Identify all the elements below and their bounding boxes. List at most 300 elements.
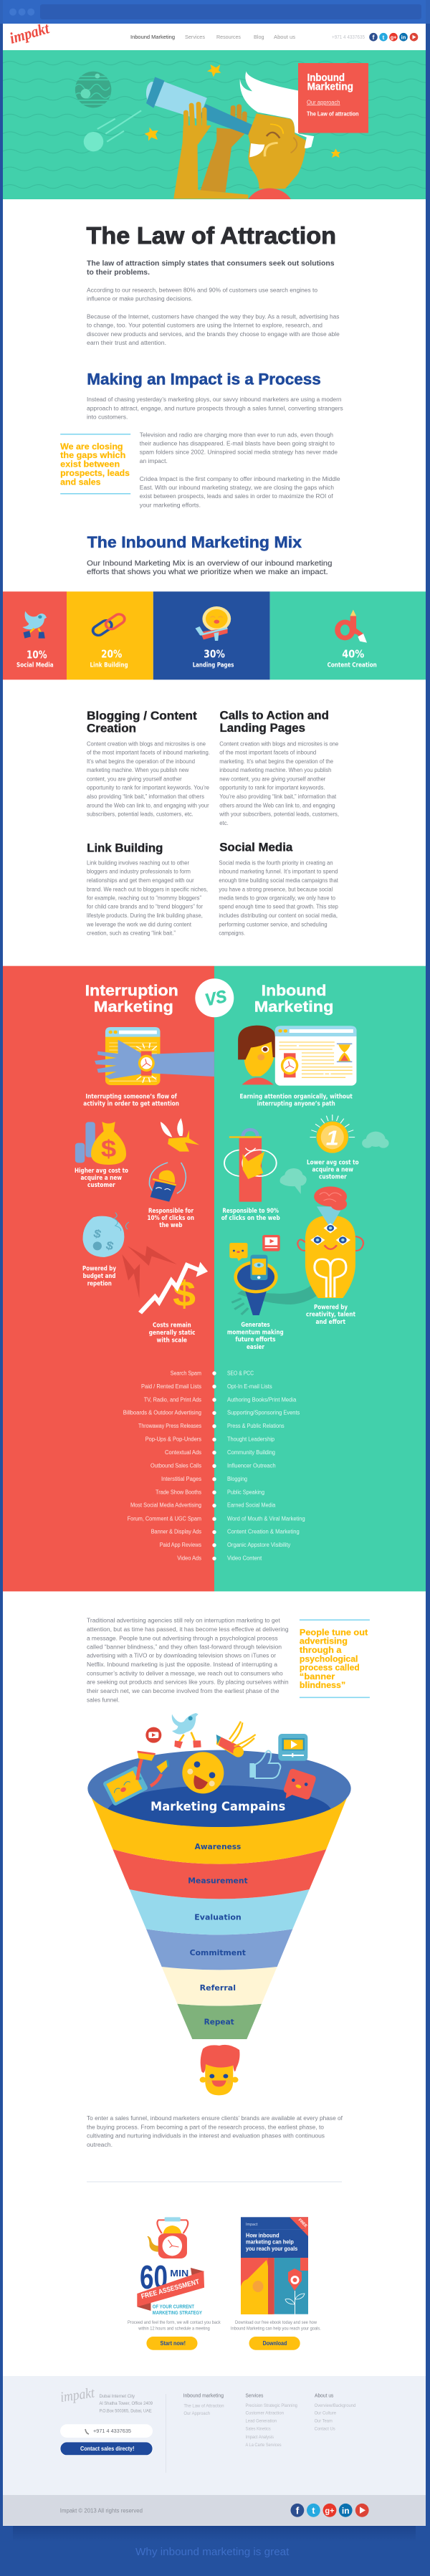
- icon: sun and plane: [195, 606, 231, 641]
- offer: free assessment: [128, 2217, 221, 2350]
- captions: interruption: Higher avg cost to: [75, 1168, 128, 1175]
- hero title card: The Law of attraction: [307, 110, 359, 117]
- article: calls to action: others around the Web can link to, and engaging: [219, 802, 335, 808]
- body text: sales funnel: outreach.: [87, 2142, 113, 2148]
- mix intro: [87, 559, 333, 576]
- list: inbound tactics: Earned Social Media: [227, 1502, 276, 1509]
- article: blogging: It’s what begins the operation of the inbound: [87, 758, 195, 765]
- body text: process intro: [87, 396, 343, 421]
- VS badge: VS: [204, 987, 229, 1010]
- body text: sales funnel: cultivating and nurturing individuals in the interest and evaluation phases with continuous: [87, 2133, 325, 2139]
- illustration: stressed head: $: [92, 1226, 103, 1241]
- lead paragraph: to their problems.: [87, 268, 150, 277]
- article: calls to action: etc.: [219, 820, 229, 826]
- illustration: chat bubble: [229, 1243, 248, 1261]
- list: inbound tactics: Organic Appstore Visibility: [227, 1542, 290, 1548]
- article: social media: performing customer service, and scheduling: [219, 921, 328, 927]
- article: blogging: also providing “link bait,” information that others: [87, 793, 204, 800]
- article: link building: for child care brands and to “trend bloggers” for: [87, 904, 203, 910]
- article: social media: campaigns.: [219, 930, 245, 937]
- article: blogging: marketing machine. When you publish new: [87, 767, 189, 773]
- nav links: Resources: [216, 34, 241, 40]
- heading: interruption marketing: [85, 982, 178, 1015]
- subtitle: of your current marketing strategy: MARKETING STRATEGY: [153, 2309, 202, 2316]
- callout: banner blindness: through a: [300, 1645, 342, 1655]
- article: social media: [219, 841, 339, 937]
- heading: inbound marketing: Inbound: [262, 982, 326, 999]
- list: interruption tactics: TV, Radio, and Print Ads: [144, 1396, 201, 1403]
- illustration: browser and wristwatch: [95, 1027, 214, 1085]
- captions: interruption: Costs remain: [153, 1322, 191, 1330]
- callout: closing the gaps: [60, 434, 130, 495]
- segment: landing pages 30%: 30%: [204, 647, 225, 660]
- button: download: [249, 2337, 300, 2350]
- offer description: Proceed and feel the form, we will contact you back: [128, 2321, 221, 2325]
- body text: research: earn their trust and attention.: [87, 340, 166, 346]
- illustration: thought cloud: [280, 1170, 307, 1194]
- captions: interruption: the web: [159, 1222, 182, 1229]
- funnel labels: Marketing Campains: [150, 1800, 285, 1814]
- offer description: Inbound Marketing can help you reach your goals.: [231, 2327, 321, 2331]
- heading: inbound marketing: Marketing: [254, 998, 333, 1015]
- list: inbound tactics: Influencer Outreach: [227, 1462, 276, 1469]
- illustration: gold coin: 1: [326, 1127, 339, 1150]
- footer links: services: Impact Analysis: [245, 2435, 274, 2440]
- captions: inbound: Lower avg cost to: [307, 1159, 359, 1166]
- illustration: video player: [262, 1235, 280, 1251]
- captions: interruption: repetion: [87, 1280, 112, 1287]
- list: interruption tactics: Paid App Reviews: [160, 1542, 201, 1548]
- article: social media: Social media is the fourth priority in creating an: [219, 859, 333, 866]
- body text: process details: Television and radio are charging more than ever to run ads, even though: [140, 431, 333, 438]
- footer links: about us: Our Culture: [315, 2411, 336, 2416]
- funnel labels: Awareness: [195, 1843, 241, 1851]
- article: blogging: Creation: [87, 722, 136, 735]
- ebook cover: you reach your goals: [246, 2245, 298, 2252]
- list: inbound tactics: Word of Mouth & Viral Marketing: [227, 1515, 305, 1522]
- article: calls to action: [219, 708, 339, 826]
- funnel band: measurement: [113, 1849, 326, 1899]
- phone pill: [60, 2424, 153, 2438]
- shirt: [248, 188, 291, 199]
- callout: banner blindness: advertising: [300, 1636, 348, 1646]
- segment: link building 20%: 20%: [101, 647, 122, 660]
- body text: research: influence or make purchasing decisions.: [87, 296, 193, 302]
- illustration: person with hat and loop: [149, 1163, 186, 1202]
- article: blogging: subscribers, potential leads, customers, etc.: [87, 811, 194, 818]
- article: link building: [86, 841, 208, 937]
- lead paragraph: [87, 259, 335, 277]
- segment: content creation 40%: 40%: [342, 648, 364, 661]
- article: blogging: Blogging / Content: [87, 709, 197, 722]
- funnel labels: Evaluation: [194, 1913, 242, 1922]
- captions: inbound: and effort: [315, 1319, 345, 1326]
- lead paragraph: The law of attraction simply states that consumers seek out solutions: [87, 259, 335, 267]
- footer links: services: Services: [245, 2393, 264, 2399]
- social icons: t: [383, 34, 385, 41]
- funnel band: repeat: [177, 2004, 262, 2039]
- hero title card: [298, 63, 368, 133]
- footer links: services: Customer Attraction: [245, 2411, 284, 2416]
- body text: process details: spam folders since 2002. Uninspired social media strategy has never made: [140, 449, 338, 456]
- captions: inbound: [221, 1093, 359, 1351]
- icon: bird: [22, 611, 47, 639]
- logo: impakt: [7, 19, 52, 47]
- illustration: money bag and coins: $: [101, 1135, 116, 1162]
- callout: banner blindness: blindness”: [300, 1680, 345, 1690]
- list: inbound tactics: Community Building: [227, 1449, 275, 1456]
- address: Dubai Internet City: [99, 2394, 135, 2399]
- comet: [84, 110, 141, 151]
- text: 60 min: 60: [140, 2258, 168, 2296]
- article: calls to action: with your subscribers, potential leads, customers,: [219, 811, 339, 818]
- subtitle: of your current marketing strategy: [153, 2304, 202, 2316]
- body text: process intro: approach to attract, engage, and nurture prospects through a sales funnel, converting strangers: [87, 406, 343, 411]
- list: interruption tactics: Forum, Comment & UGC Spam: [128, 1515, 201, 1522]
- list: interruption tactics: Paid / Rented Email Lists: [141, 1383, 201, 1390]
- article: link building: bloggers and industry professionals to form: [87, 869, 191, 875]
- panel: inbound marketing: [214, 966, 426, 1591]
- icon: smiley: [182, 1752, 224, 1793]
- captions: interruption: acquire a new: [80, 1175, 122, 1182]
- list: inbound tactics: [227, 1370, 305, 1561]
- article: blogging: around the Web can link to, and engaging with your: [87, 802, 209, 808]
- segment: social media 10%: [3, 591, 67, 679]
- article: calls to action: new content, you are giving yourself another: [219, 776, 326, 782]
- article: link building: lifestyle products. During the link building phase,: [87, 912, 203, 919]
- body text: banner blindness: Netflix. Inbound marketing is just the opposite. Instead of interrupting a: [87, 1661, 278, 1668]
- social icons: g+: [391, 36, 396, 40]
- article: link building: creation, such as creating “link bait.”: [87, 930, 176, 937]
- social icons: [291, 2504, 369, 2517]
- article: social media: Social Media: [219, 841, 293, 854]
- captions: inbound: Earning attention organically, without: [239, 1093, 353, 1100]
- ebook cover: FREE: [297, 2218, 308, 2228]
- article: link building: Link building involves reaching out to other: [87, 859, 189, 866]
- heading: interruption marketing: Marketing: [94, 998, 173, 1015]
- icon: bird: [172, 1713, 201, 1748]
- callout: banner blindness: People tune out: [300, 1628, 368, 1638]
- offer description: [231, 2321, 321, 2331]
- text: 60 min: MIN: [170, 2269, 188, 2279]
- offer description: within 12 hours and schedule a meeting: [138, 2327, 210, 2331]
- footer links: services: Precision Strategic Planning: [245, 2403, 297, 2408]
- contact button: Contact sales directy!: [80, 2446, 135, 2452]
- address: [99, 2394, 153, 2413]
- body text: research: discover new products and services, and the brands they choose to engage with are those able: [87, 331, 340, 338]
- list: inbound tactics: Content Creation & Marketing: [227, 1529, 300, 1535]
- segment: content creation 40%: [270, 591, 426, 679]
- contact button: [60, 2442, 153, 2456]
- body text: process details: exist between prospects, leads and sales in order to maximize the ROI of: [140, 493, 333, 500]
- illustration: rising arrow and dollar: $: [173, 1274, 196, 1315]
- captions: interruption: activity in order to get attention: [83, 1101, 179, 1108]
- hero illustration: man with telescope: [3, 50, 426, 199]
- article: link building: relationships and get them engaged with our: [87, 877, 194, 884]
- body text: banner blindness: consumer’s activity to deliver a message, we reach out to consumers who: [87, 1670, 283, 1676]
- footer links: about us: Our Team: [315, 2419, 333, 2424]
- footer links: inbound marketing: [183, 2393, 224, 2416]
- list: interruption tactics: [123, 1370, 201, 1561]
- list: inbound tactics: Opt-In E-mail Lists: [227, 1383, 272, 1390]
- heading: Making an Impact is a Process: Making an Impact is a Process: [87, 371, 321, 388]
- captions: inbound: interrupting anyone’s path: [257, 1101, 335, 1108]
- body text: banner blindness: Traditional advertising agencies still rely on interruption marketing to get: [87, 1618, 281, 1624]
- article: link building: brand. We reach out to bloggers in specific niches,: [87, 886, 208, 892]
- illustration: rising arrow and dollar: [140, 1262, 208, 1315]
- back arm: [200, 106, 248, 192]
- illustration: woman and web page: [238, 1026, 356, 1086]
- illustration: money bag and coins: [75, 1122, 126, 1165]
- list: inbound tactics: Blogging: [227, 1476, 247, 1482]
- phone number: +971 4 4337635: [332, 35, 365, 40]
- button: start now: Start now!: [161, 2340, 186, 2347]
- mix intro: efforts that shows you what we prioritize when we make an impact.: [87, 568, 328, 576]
- body text: process details: [140, 431, 340, 509]
- head: [240, 71, 314, 189]
- article: social media: media tends to grow organically, we only have to: [219, 895, 336, 901]
- body text: process details: their audience has disappeared. E-mail blasts have been going straight to: [140, 440, 335, 447]
- body text: banner blindness: are seeking out products and services like yours. By placing ourselves within: [87, 1679, 289, 1686]
- icon: kettle clock: [147, 2217, 188, 2258]
- article: calls to action: marketing. It’s what begins the operation of the: [219, 758, 334, 765]
- offer description: Download our free ebook today and see how: [235, 2321, 317, 2325]
- nav links: Blog: [254, 34, 264, 40]
- address: P.O.Box 500365, Dubai, UAE: [99, 2408, 152, 2413]
- icon: pen letter d: [338, 610, 367, 643]
- social icons: [369, 33, 418, 42]
- callout: banner blindness: [300, 1619, 370, 1698]
- article: link building: Link Building: [87, 841, 163, 854]
- body text: research: Because of the Internet, customers have changed the way they buy. As a result, advertising has: [87, 313, 339, 320]
- funnel band: commitment: [146, 1929, 292, 1970]
- list: interruption tactics: Interstitial Pages: [161, 1476, 201, 1482]
- funnel labels: Repeat: [204, 2018, 234, 2026]
- browser top bar: [0, 0, 430, 24]
- callout: banner blindness: process called: [300, 1663, 360, 1673]
- address: Al Shatha Tower, Office 2409: [99, 2401, 153, 2406]
- funnel: marketing campaigns: [87, 1713, 351, 2039]
- captions: interruption: Powered by: [82, 1266, 116, 1273]
- article: calls to action: opportunity to rank for important keywords.: [219, 785, 325, 791]
- captions: inbound: future efforts: [235, 1337, 276, 1344]
- button: start now: [146, 2337, 198, 2350]
- article: calls to action: Content creation with blogs and microsites is one: [219, 740, 339, 747]
- body text: banner blindness: sales funnel.: [87, 1697, 120, 1703]
- article: link building: for example, reaching out to “mommy bloggers”: [87, 895, 201, 901]
- hero title card: Our approach: [307, 99, 340, 105]
- footer links: services: Lead Generation: [245, 2419, 277, 2424]
- body text: process details: an impact.: [140, 458, 168, 464]
- social icons: in: [342, 2506, 350, 2516]
- list: interruption tactics: Banner & Display Ads: [151, 1529, 201, 1535]
- segment: link building 20%: [67, 591, 153, 679]
- heading: inbound marketing: [254, 982, 333, 1015]
- article: blogging: Content creation with blogs and microsites is one: [87, 740, 206, 747]
- captions: inbound: customer: [319, 1174, 347, 1181]
- captions: inbound: Generates: [241, 1322, 270, 1329]
- list: interruption tactics: Search Spam: [171, 1370, 201, 1376]
- segment: link building 20%: Link Building: [90, 662, 128, 669]
- funnel labels: [150, 1800, 285, 2026]
- callout: banner blindness: “banner: [300, 1671, 335, 1681]
- footer links: services: Sales Kinetics: [245, 2427, 271, 2432]
- funnel band: evaluation: [130, 1889, 310, 1935]
- ebook cover: marketing can help: [246, 2238, 294, 2246]
- body text: sales funnel: [87, 2115, 343, 2148]
- list: interruption tactics: Throwaway Press Releases: [138, 1423, 201, 1429]
- captions: interruption: generally static: [149, 1330, 195, 1337]
- footer links: services: A La Carte Services: [245, 2443, 282, 2448]
- footer links: about us: Contact Us: [315, 2427, 335, 2432]
- captions: interruption: Interrupting someone’s flow of: [85, 1094, 177, 1101]
- callout: closing the gaps: prospects, leads: [60, 468, 130, 478]
- callout: closing the gaps: and sales: [60, 477, 101, 487]
- footer: [3, 2376, 426, 2495]
- ebook cover: Impact: [246, 2223, 258, 2227]
- callout: closing the gaps: the gaps which: [60, 450, 125, 460]
- offer description: [128, 2321, 221, 2331]
- heading: interruption marketing: Interruption: [85, 982, 178, 999]
- body text: banner blindness: attention, but as time has passed, it has become less effective at delivering: [87, 1626, 289, 1633]
- article: calls to action: Calls to Action and: [219, 708, 329, 722]
- body text: banner blindness: called “banner blindness,” and they often fast-forward through television: [87, 1644, 282, 1650]
- icon: video player: [278, 1734, 307, 1761]
- nav links: [130, 34, 295, 40]
- phone pill: +971 4 4337635: [93, 2428, 131, 2434]
- list: interruption tactics: Video Ads: [177, 1555, 201, 1561]
- captions: inbound: Responsible to 90%: [222, 1208, 279, 1215]
- captions: inbound: Powered by: [314, 1304, 348, 1312]
- body text: sales funnel: the buying process. From becoming a part of the research process, the earliest phase, to: [87, 2124, 325, 2130]
- copyright: Impakt © 2013 All rights reserved: [60, 2507, 143, 2514]
- body text: banner blindness: [87, 1618, 289, 1703]
- body text: banner blindness: a message. People tune out advertising through a psychological process: [87, 1635, 278, 1641]
- article: blogging: of the most important facets of inbound marketing.: [87, 750, 210, 756]
- footer shadow: [13, 2526, 416, 2542]
- article: blogging: content, you are giving yourself another: [87, 776, 182, 782]
- body text: banner blindness: advertising with a TiVO or by downloading television shows on iTunes or: [87, 1653, 276, 1659]
- subtitle: of your current marketing strategy: OF YOUR CURRENT: [153, 2304, 194, 2310]
- nav links: Services: [185, 34, 205, 40]
- captions: inbound: creativity, talent: [306, 1312, 355, 1319]
- footer logo: impakt: [59, 2385, 96, 2405]
- icon: chain: [91, 612, 127, 637]
- funnel band: referral: [162, 1967, 277, 2005]
- list: interruption tactics: Contextual Ads: [165, 1449, 201, 1456]
- front arm: [173, 104, 248, 199]
- article: calls to action: Landing Pages: [219, 721, 305, 735]
- captions: interruption: 10% of clicks on: [148, 1215, 194, 1222]
- article: calls to action: inbound marketing machine. When you publish: [219, 767, 331, 773]
- article: social media: inbound marketing funnel. It’s important to spend: [219, 869, 338, 875]
- list: inbound tactics: Supporting/Sponsoring Events: [227, 1410, 300, 1416]
- article: link building: we leverage the work we did during content: [86, 921, 192, 927]
- ebook cover: [241, 2217, 308, 2314]
- button: download: Download: [263, 2340, 287, 2347]
- body text: process details: your marketing efforts.: [140, 502, 201, 509]
- article: blogging: opportunity to rank for important keywords. You’re: [87, 785, 210, 791]
- footer bottom bar: [3, 2495, 426, 2526]
- article: blogging: [87, 709, 210, 818]
- icon: sneakers: [138, 1751, 168, 1786]
- ebook cover: How inbound: [246, 2232, 280, 2239]
- footer links: inbound marketing: The Law of Attraction: [183, 2403, 224, 2408]
- body text: sales funnel: To enter a sales funnel, inbound marketers ensure clients’ brands are available at every phase of: [87, 2115, 343, 2122]
- segment: landing pages 30%: [153, 591, 270, 679]
- list: inbound tactics: Public Speaking: [227, 1489, 264, 1495]
- list: inbound tactics: Press & Public Relations: [227, 1423, 285, 1429]
- list: inbound tactics: Authoring Books/Print Media: [227, 1396, 297, 1403]
- site navigation: [7, 19, 418, 47]
- list: interruption tactics: Pop-Ups & Pop-Unders: [145, 1436, 201, 1443]
- segment: content creation 40%: Content Creation: [328, 662, 377, 669]
- body text: process intro: into customers.: [87, 414, 128, 421]
- list: inbound tactics: Thought Leadership: [227, 1436, 275, 1443]
- funnel band: awareness: [92, 1798, 347, 1864]
- marketing mix bar: [3, 591, 426, 679]
- captions: interruption: customer: [87, 1182, 115, 1189]
- offer: free ebook: [231, 2217, 321, 2350]
- stars: [145, 65, 340, 158]
- segment: landing pages 30%: Landing Pages: [193, 662, 234, 669]
- panel: interruption marketing: [3, 966, 214, 1591]
- illustration: funnel with phone: [231, 1255, 278, 1315]
- article: social media: enough time building social media campaigns that: [219, 877, 339, 884]
- list: interruption tactics: Trade Show Booths: [156, 1489, 201, 1495]
- illustration: clouds: [285, 1132, 389, 1183]
- social icons: in: [401, 34, 406, 40]
- footer links: about us: About us: [315, 2393, 334, 2399]
- body text: banner blindness: their search net, we can become involved from the earliest phase of the: [87, 1688, 280, 1694]
- article: social media: spend enough time to seed that growth. This step: [219, 904, 338, 910]
- footer links: services: [245, 2393, 297, 2448]
- footer links: about us: [315, 2393, 356, 2432]
- list: inbound tactics: SEO & PCC: [227, 1370, 254, 1376]
- captions: interruption: [75, 1094, 195, 1344]
- nav links: About us: [274, 34, 295, 40]
- icon: winged pencil: [216, 1722, 256, 1757]
- list: interruption tactics: Most Social Media Advertising: [130, 1502, 201, 1509]
- illustration: three-eyed head with brain: [297, 1186, 363, 1298]
- captions: interruption: budget and: [83, 1273, 116, 1280]
- social icons: f: [373, 34, 376, 41]
- captions: inbound: acquire a new: [312, 1167, 353, 1174]
- list: interruption tactics: Billboards & Outdoor Advertising: [123, 1410, 201, 1416]
- ribbon: free assessment: FREE ASSESSMENT: [140, 2278, 200, 2301]
- social icons: t: [312, 2505, 315, 2516]
- callout: banner blindness: psychological: [300, 1654, 358, 1664]
- icon: thumbs up: [249, 1751, 280, 1778]
- illustration: boy's face below funnel: [200, 2045, 240, 2095]
- article: social media: includes distributing our content on social media,: [219, 912, 338, 919]
- article: social media: you have a strong presence, but because social: [219, 886, 333, 892]
- captions: inbound: momentum making: [227, 1329, 284, 1336]
- illustration: hand shadow: [237, 1282, 324, 1304]
- illustration: stressed head: [83, 1213, 129, 1257]
- body text: process details: Cridea Impact is the first company to offer inbound marketing in the Middle: [140, 476, 340, 482]
- body text: research: [87, 287, 340, 346]
- funnel labels: Commitment: [190, 1949, 246, 1957]
- callout: closing the gaps: We are closing: [60, 442, 123, 452]
- funnel mouth: [87, 1750, 351, 1827]
- article: calls to action: You’re also providing “link bait,” information that: [219, 793, 337, 800]
- segment: social media 10%: 10%: [27, 648, 47, 661]
- illustration: stressed head: $: [105, 1239, 115, 1253]
- mix intro: Our Inbound Marketing Mix is an overview of our inbound marketing: [87, 559, 333, 568]
- next article link: Why inbound marketing is great: [135, 2546, 290, 2558]
- illustration: gold coin: [310, 1115, 355, 1153]
